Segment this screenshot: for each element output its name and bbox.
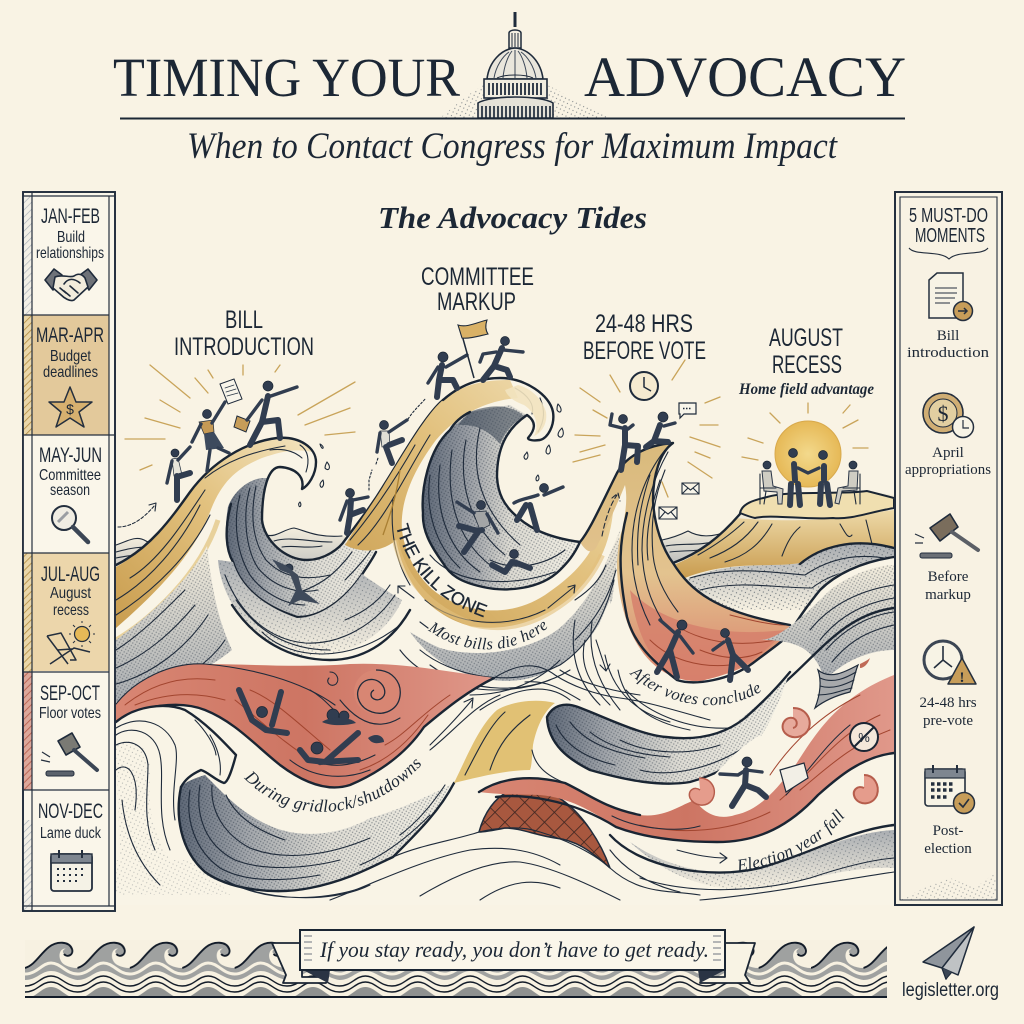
rays (125, 365, 355, 470)
label: the kill zone: THE KILL ZONE (397, 522, 488, 618)
swimmers (239, 690, 384, 762)
sun rays (742, 403, 868, 460)
figure in curl 1 (272, 559, 320, 606)
man pointing (247, 381, 297, 445)
moment: before markup: markup (925, 587, 971, 603)
moment: 24-48 hrs pre-vote (919, 695, 977, 729)
moment: bill introduction: introduction (907, 345, 990, 361)
month: jan-feb: Build (57, 229, 85, 246)
climber and flag (428, 320, 488, 397)
rising arrow (602, 493, 620, 536)
month: jan-feb: relationships (36, 245, 104, 262)
moment: 24-48 hrs pre-vote: pre-vote (923, 713, 973, 729)
icon: document (929, 273, 972, 320)
moment: post-election (924, 823, 972, 857)
election arrow (677, 850, 727, 863)
icon: gavel (41, 733, 97, 776)
briefcase (234, 416, 250, 432)
swirls (689, 778, 714, 805)
moment: post-election: Post- (933, 823, 963, 839)
row tints (23, 192, 115, 911)
icon: calendar with check (925, 765, 974, 814)
panel heading: 5 MUST-DO (909, 205, 988, 227)
moment: april appropriations: April (932, 445, 964, 461)
figures: 24-48 hours before vote (573, 360, 720, 519)
kill zone band (392, 522, 605, 650)
stage label: 24-48 hrs before vote (583, 310, 706, 365)
icon: gavel (915, 514, 978, 558)
wave 2: committee markup (345, 378, 614, 628)
wave 3: 24-48 hours (580, 443, 894, 682)
climbing figures: committee markup (272, 320, 563, 606)
red band: gridlock (116, 663, 496, 812)
stage label: august recess: AUGUST (769, 324, 843, 352)
label: election year fall: Election year fall (738, 808, 844, 870)
stage label: committee markup (421, 263, 534, 316)
paper (220, 379, 242, 404)
month: jul-aug: JUL-AUG (41, 563, 100, 586)
heading: the advocacy tides: The Advocacy Tides (378, 200, 647, 235)
brand url: legisletter.org (902, 980, 999, 1001)
kneeling figure (646, 412, 675, 447)
clock (630, 372, 658, 400)
month: jan-feb: JAN-FEB (41, 205, 100, 228)
moment: april appropriations: appropriations (905, 462, 991, 478)
panel: 5 must-do moments (895, 192, 1002, 905)
panel: calendar timeline (23, 192, 115, 911)
title rule (120, 118, 905, 120)
envelopes (659, 483, 699, 519)
climbing figures: bill introduction (125, 365, 355, 500)
wave 1: gold crest (116, 400, 443, 640)
month: mar-apr (36, 324, 104, 381)
man with phone (610, 414, 638, 470)
cliff body (673, 491, 894, 600)
month: jul-aug (41, 563, 100, 619)
moment: 24-48 hrs pre-vote: 24-48 hrs (919, 695, 977, 711)
month: mar-apr: Budget (50, 348, 91, 365)
month: nov-dec (38, 800, 103, 842)
curl 1 crescent (226, 478, 384, 617)
moment: post-election: election (924, 841, 972, 857)
icon: capitol dome (440, 12, 610, 118)
label: after votes: After votes conclude (629, 669, 761, 706)
month: sep-oct: Floor votes (39, 705, 101, 722)
start arrow (118, 505, 155, 527)
quote text: If you stay ready, you don’t have to get ready. (319, 937, 709, 962)
chat bubble (679, 403, 696, 418)
month: jul-aug: August (50, 585, 91, 602)
figures in the curl (457, 484, 563, 572)
month: mar-apr: deadlines (43, 364, 98, 381)
lower-left big wave (116, 706, 454, 900)
running figure (720, 757, 808, 806)
stage label: 24-48 hrs before vote: BEFORE VOTE (583, 337, 706, 365)
month: sep-oct (39, 682, 101, 722)
water drops (299, 444, 329, 507)
net hill and lower waves (225, 787, 894, 900)
month: jan-feb (36, 205, 104, 262)
stage label: committee markup: COMMITTEE (421, 263, 534, 291)
icon: beach chair and sun (47, 621, 95, 664)
icon: star: $ (66, 401, 74, 417)
banner: quote (272, 930, 755, 983)
label: most bills die here: Most bills die here (428, 622, 548, 650)
icon: calendar (51, 850, 92, 891)
moment: april appropriations (905, 445, 991, 478)
footer wave band (25, 940, 887, 998)
plateau top (740, 491, 894, 518)
kill zone arrows (398, 585, 575, 628)
stage label: committee markup: MARKUP (437, 288, 516, 316)
title: timing your: TIMING YOUR (113, 47, 460, 108)
panel heading (909, 205, 988, 259)
month: nov-dec: NOV-DEC (38, 800, 103, 823)
pool figures: after votes conclude (657, 620, 748, 680)
icon: clock with warning: ! (960, 670, 964, 686)
stage label: august recess: RECESS (772, 351, 842, 379)
moment: before markup: Before (928, 569, 969, 585)
plateau: august recess (673, 403, 894, 610)
icon: coin and clock: $ (938, 401, 948, 426)
subtitle: When to Contact Congress for Maximum Impact (187, 126, 839, 167)
crest 1 (116, 400, 443, 565)
sun (775, 421, 841, 487)
stage label: bill introduction: BILL (225, 306, 263, 334)
main wave body with curls (116, 378, 894, 905)
stage label: august recess: Home field advantage (738, 381, 874, 398)
child (167, 447, 190, 500)
icon: star (49, 387, 92, 427)
month: nov-dec: Lame duck (40, 825, 102, 842)
no-percent circle (850, 723, 878, 751)
icon: coin and clock (923, 393, 974, 438)
flag scrap (815, 665, 858, 708)
middle gold peak and gray wave (429, 665, 792, 785)
icon: paper plane (923, 927, 974, 979)
month: may-jun: MAY-JUN (39, 444, 102, 467)
curl 2 crescent (423, 405, 580, 589)
red swirl (354, 670, 400, 714)
stage label: bill introduction (174, 306, 314, 361)
rays (573, 360, 720, 497)
red band: election year (478, 658, 894, 870)
month: jul-aug: recess (53, 602, 89, 619)
icon: magnifier (52, 506, 88, 542)
moment: bill introduction (907, 328, 990, 361)
month: may-jun (39, 444, 102, 499)
wave field illustration (116, 263, 894, 901)
gray wave layers (116, 530, 894, 741)
icon: handshake (45, 269, 97, 301)
runner at crest (480, 336, 523, 380)
moment: before markup (925, 569, 971, 603)
title: advocacy: ADVOCACY (584, 46, 906, 109)
month: mar-apr: MAR-APR (36, 324, 104, 347)
meeting figures (760, 448, 860, 505)
stage label: bill introduction: INTRODUCTION (174, 333, 314, 361)
woman (192, 402, 229, 471)
panel heading: MOMENTS (915, 225, 985, 247)
no-percent circle: % (858, 730, 870, 745)
arrow (430, 698, 473, 745)
month: may-jun: season (50, 482, 90, 499)
month: may-jun: Committee (39, 467, 101, 484)
stage label: august recess (738, 324, 874, 398)
header: title and subtitle (113, 12, 906, 167)
back sea (116, 528, 730, 590)
label: during gridlock: During gridlock/shutdowns (244, 759, 421, 812)
month: sep-oct: SEP-OCT (40, 682, 100, 705)
stage label: 24-48 hrs before vote: 24-48 HRS (595, 310, 693, 338)
moment: bill introduction: Bill (937, 328, 959, 344)
icon: clock with warning (924, 641, 976, 686)
